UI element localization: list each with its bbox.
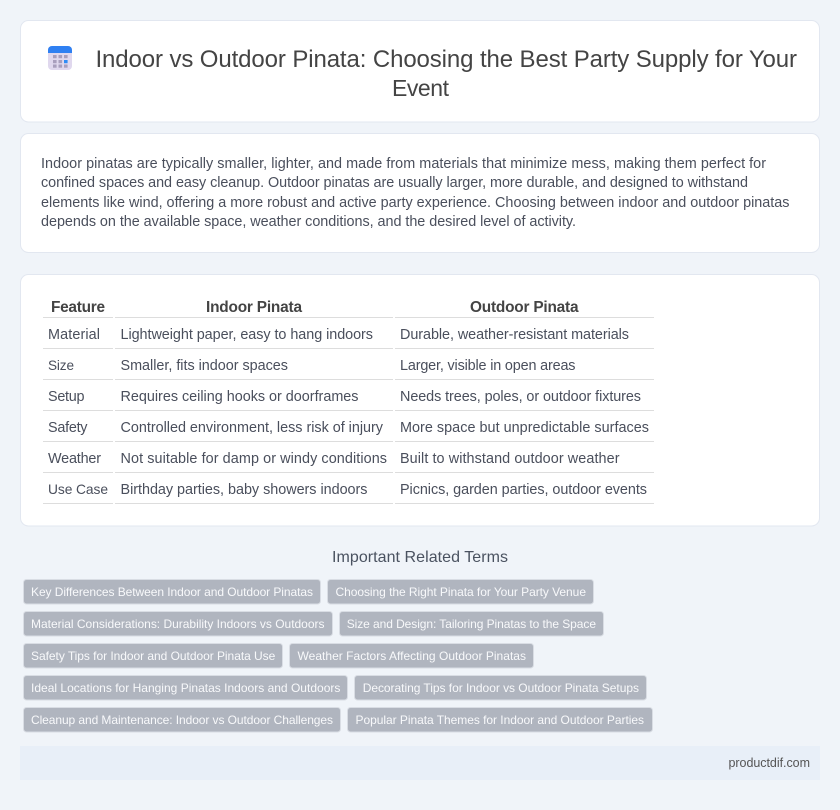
panel: header [20,20,820,122]
tag: Choosing the Right Pinata for Your Party Venue [336,585,586,599]
table row: weather: Built to withstand outdoor weather [400,451,620,467]
table row: setup: Setup [48,389,84,405]
table row: weather: Not suitable for damp or windy conditions [120,451,387,467]
text block: introduction: Indoor pinatas are typically smaller, lighter, and made from materials that minimize mess, making them perfect for [41,156,766,172]
tag [328,580,594,604]
tag [348,708,652,732]
table row: weather [48,451,620,467]
table row: safety [48,420,649,436]
tag [24,708,340,732]
table row: setup: Needs trees, poles, or outdoor fixtures [400,389,641,405]
text block: introduction: confined spaces and easy cleanup. Outdoor pinatas are usually larger, more durable, and designed to withstand [41,175,748,191]
table row: size [48,358,576,374]
table header row [51,299,579,316]
table row: setup [48,389,641,405]
tag [24,676,348,700]
text block: introduction: depends on the available space, weather conditions, and the desired level of activity. [41,214,576,230]
tag: Ideal Locations for Hanging Pinatas Indoors and Outdoors [31,681,340,695]
table row: material [48,327,629,343]
tag: Material Considerations: Durability Indoors vs Outdoors [31,617,324,631]
table row: size: Size [48,358,74,373]
title [96,46,797,101]
panel: comparison table [20,274,820,526]
table row: material: Durable, weather-resistant materials [400,327,629,343]
table row: material: Lightweight paper, easy to hang indoors [120,327,373,343]
table row: use case [48,482,647,498]
table row: size: Larger, visible in open areas [400,358,576,374]
table row: use case: Picnics, garden parties, outdoor events [400,482,647,498]
table row: setup: Requires ceiling hooks or doorframes [120,389,358,405]
table header row: Outdoor Pinata [470,299,579,316]
tag: Cleanup and Maintenance: Indoor vs Outdoor Challenges [31,713,333,727]
tag: Decorating Tips for Indoor vs Outdoor Pinata Setups [363,681,639,695]
table row: safety: Controlled environment, less risk of injury [120,420,384,436]
title: Event [392,75,450,101]
table row: use case: Use Case [48,482,108,497]
table row: weather: Weather [48,451,101,467]
tag: Weather Factors Affecting Outdoor Pinatas [298,649,526,663]
footer [20,746,820,780]
tag: Safety Tips for Indoor and Outdoor Pinata Use [31,649,276,663]
tag [290,644,534,668]
table row: use case: Birthday parties, baby showers indoors [120,482,368,498]
tag [24,580,320,604]
tag [24,612,332,636]
tag [24,644,282,668]
table row: material: Material [48,327,100,343]
panel: introduction text [20,134,820,252]
icon: calendar [48,46,72,70]
tag: Key Differences Between Indoor and Outdoor Pinatas [31,585,313,599]
tag [340,612,604,636]
related term tags [24,580,652,732]
heading: related terms: Important Related Terms [332,549,508,566]
tag: Popular Pinata Themes for Indoor and Outdoor Parties [356,713,644,727]
title: Indoor vs Outdoor Pinata: Choosing the Best Party Supply for Your [96,46,797,73]
footer: productdif.com [728,756,810,770]
table row: size: Smaller, fits indoor spaces [120,358,288,374]
text block: introduction: elements like wind, offering a more robust and active party experience. Choosing between indoor and outdoor pinatas [41,195,790,211]
table row: safety: More space but unpredictable surfaces [400,420,649,436]
table row: safety: Safety [48,420,88,436]
tag [354,676,646,700]
table header row: Feature [51,299,105,316]
tag: Size and Design: Tailoring Pinatas to the Space [347,617,596,631]
table header row: Indoor Pinata [206,299,302,316]
text block: introduction [41,156,790,230]
